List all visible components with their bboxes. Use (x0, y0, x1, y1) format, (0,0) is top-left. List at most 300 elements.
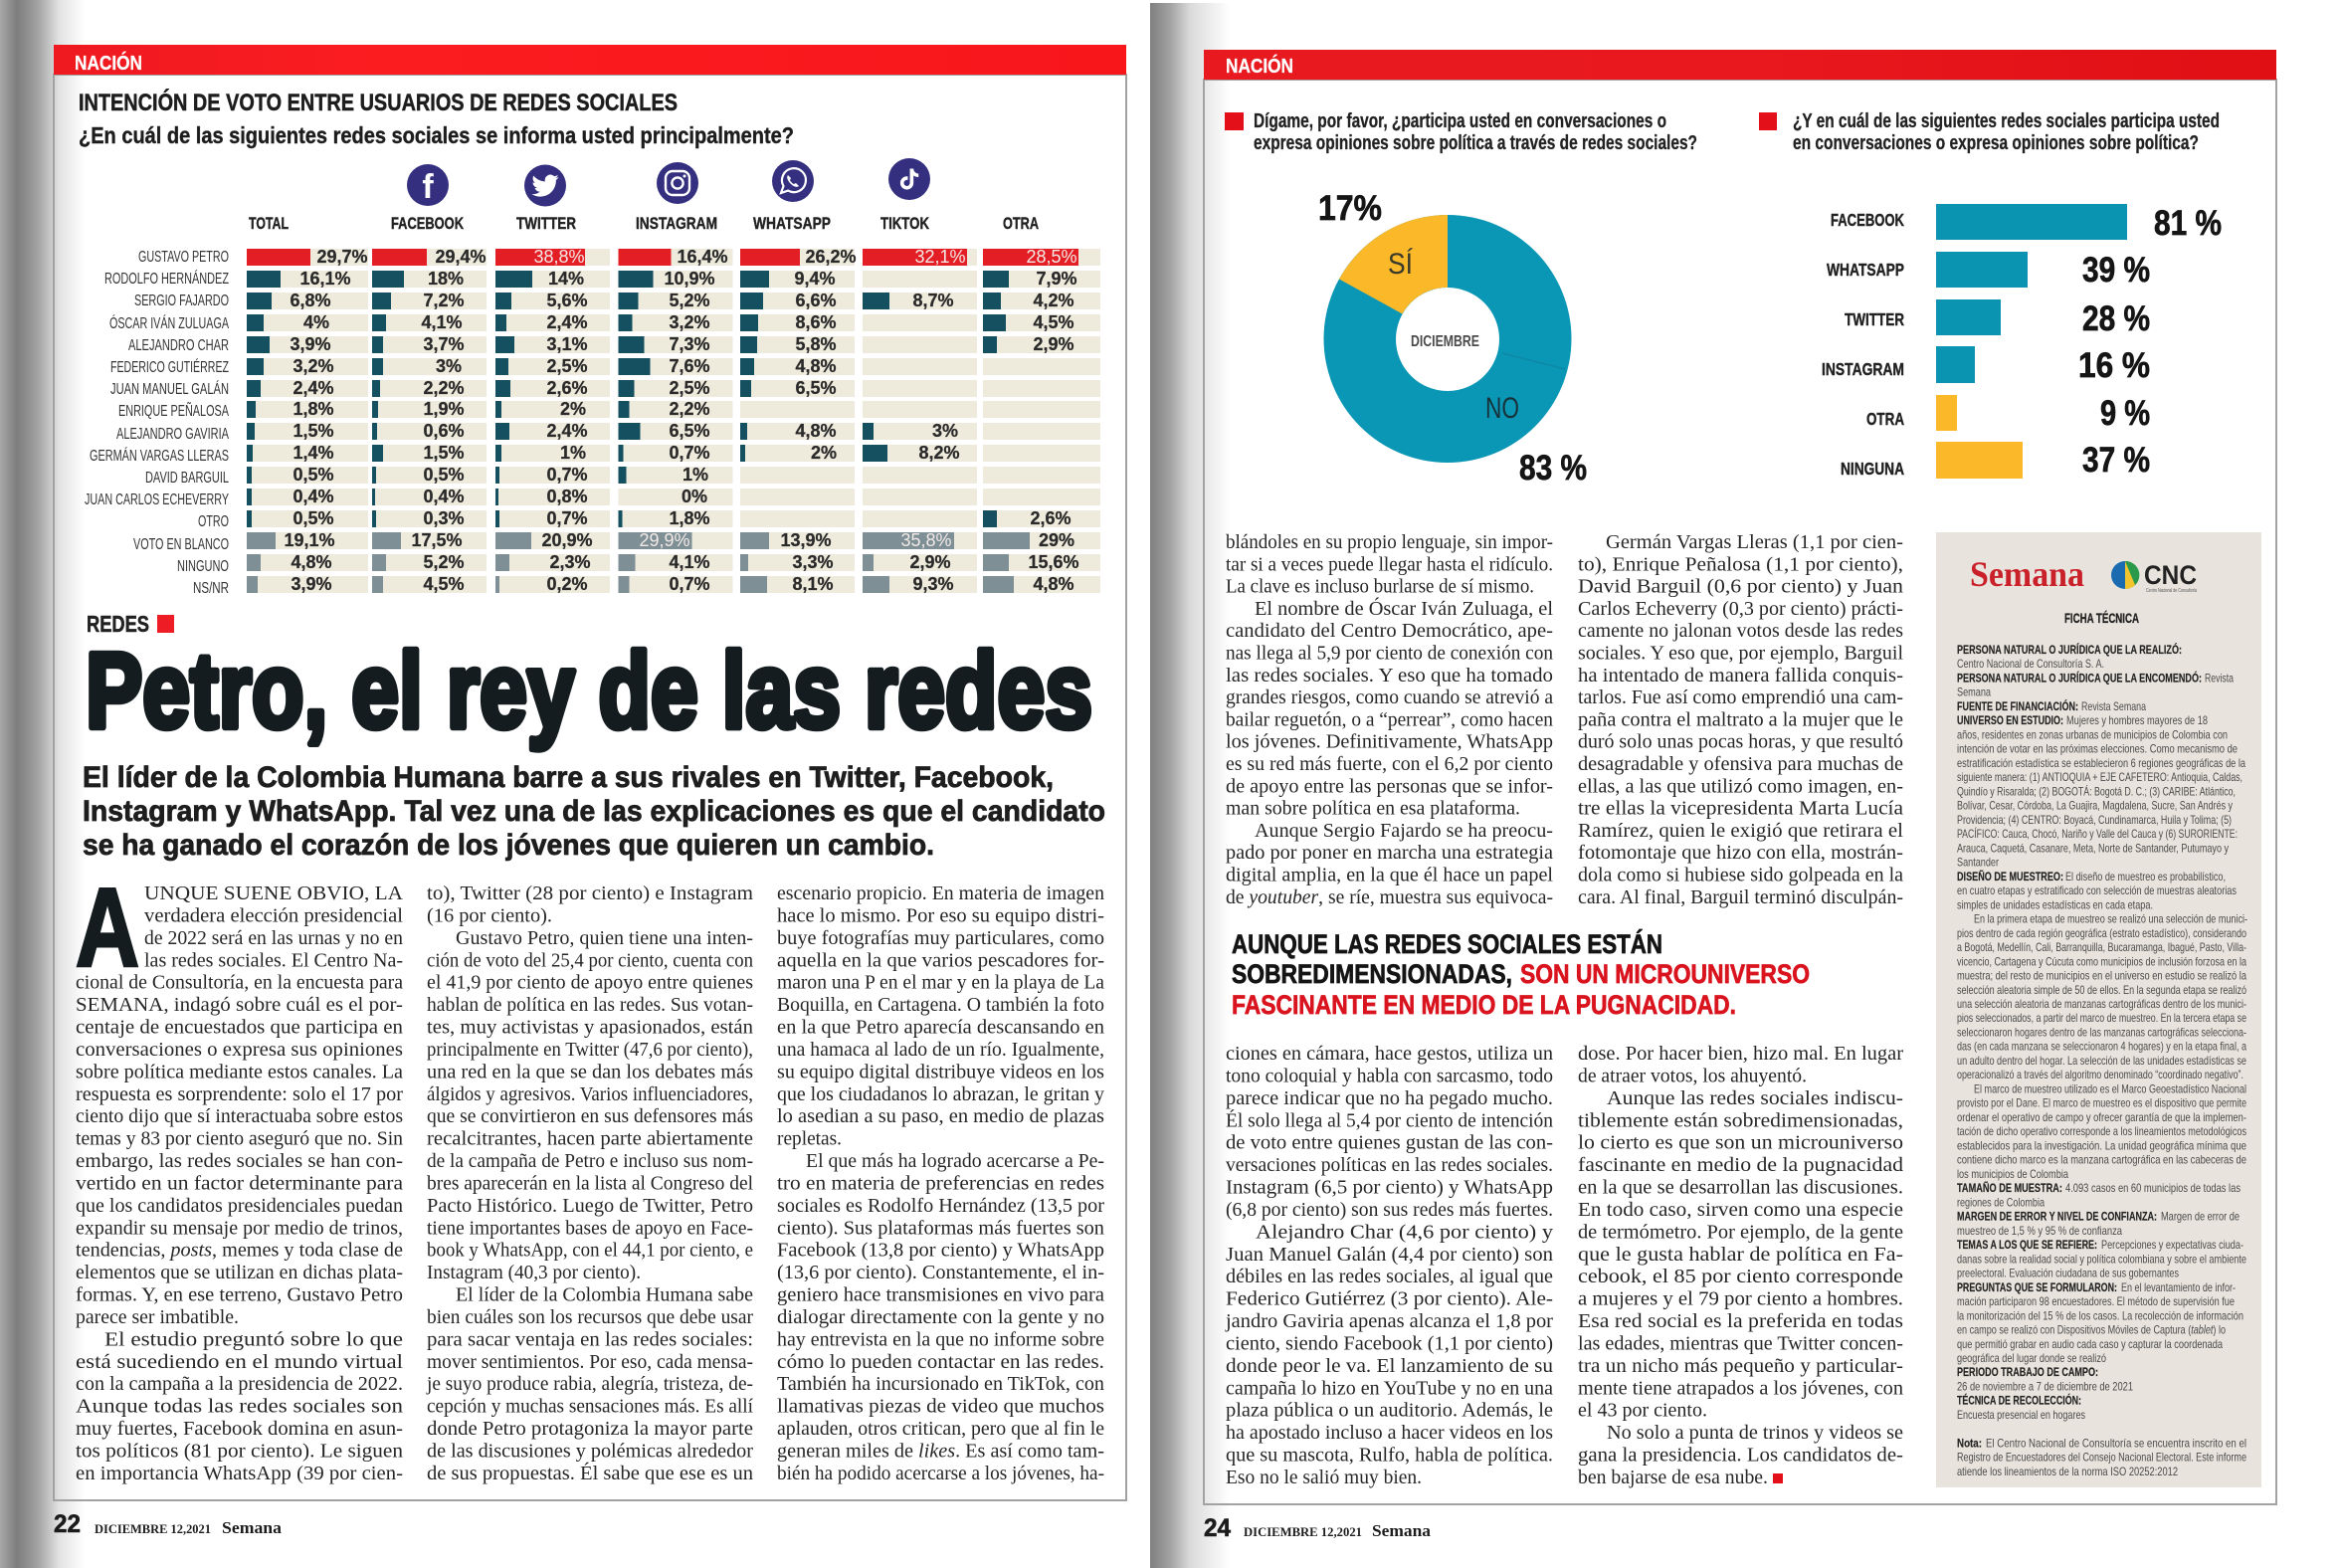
column: facebook: 4,5% (423, 574, 465, 594)
article lower column 1: jandro Gaviria apenas alcanza el 1,8 por (1225, 1310, 1553, 1332)
column: total: 3,9% (290, 334, 331, 354)
article lower column 2: de termómetro. Por ejemplo, de la gente (1578, 1221, 1903, 1243)
article column 1: SEMANA, indagó sobre cuál es el por- (76, 994, 403, 1016)
article column 2: álgidos y agresivos. Varios influenciadores, (427, 1083, 753, 1105)
article column 3: que los ciudadanos lo abrazan, le gritan y (777, 1083, 1104, 1105)
article column 2: book y WhatsApp, con el 44,1 por ciento, e (427, 1240, 753, 1262)
column: total: 0,5% (292, 508, 334, 528)
question 2 (1759, 110, 2220, 154)
column headers: FACEBOOK (391, 214, 465, 233)
article upper column 2: desagradable y ofensiva para muchas de (1578, 753, 1903, 775)
column: instagram: 5,2% (669, 291, 710, 310)
column: total: 19,1% (284, 530, 335, 550)
ficha text: Santander (1957, 856, 1999, 870)
article column 1: conversaciones o expresa sus opiniones (76, 1039, 403, 1061)
chart title: INTENCIÓN DE VOTO ENTRE USUARIOS DE REDES SOCIALES (79, 89, 678, 116)
column: whatsapp: 8,1% (792, 574, 834, 594)
question 1: Dígame, por favor, ¿participa usted en conversaciones o (1254, 110, 1666, 132)
article lower column 2: de atraer votos, los ahuyentó. (1578, 1065, 1807, 1086)
column headers (249, 214, 1039, 233)
ficha text: DISEÑO DE MUESTREO: (1957, 869, 2063, 883)
ficha heading: FICHA TÉCNICA (2064, 610, 2139, 626)
article upper column 1: los jóvenes. Definitivamente, WhatsApp (1226, 731, 1553, 753)
column: tiktok: 3% (932, 421, 958, 441)
ficha text: Revista (2205, 671, 2234, 685)
article upper column 2: tre ellas la vicepresidenta Marta Lucía (1578, 798, 1903, 820)
article column 3 (777, 882, 1104, 1484)
article column 2: hablan de política en las redes. Sus votan- (427, 994, 753, 1016)
article lower column 1: que su mascota, Rulfo, habla de política. (1226, 1445, 1553, 1467)
article column 1: verdadera elección presidencial (144, 904, 403, 926)
ficha text: siguiente manera: (1) ANTIOQUIA + EJE CAFETERO: Antioquia, Caldas, (1957, 770, 2242, 784)
row labels: candidates: GUSTAVO PETRO (138, 249, 229, 266)
section bar: Nación (1204, 50, 2276, 80)
article column 3: geniero hace transmisiones en vivo para (777, 1284, 1104, 1306)
article lower column 1: débiles en las redes sociales, al igual que (1226, 1266, 1553, 1287)
column: facebook: 1,5% (423, 443, 465, 463)
section bar: Nación (54, 45, 1126, 75)
column: twitter: 38,8% (533, 247, 585, 267)
article upper column 1 (1226, 531, 1553, 908)
article lower column 2: a mujeres y el 79 por ciento a hombres. (1578, 1288, 1903, 1310)
column: twitter: 0,7% (546, 465, 588, 485)
article column 1: embargo, las redes sociales se han con- (76, 1150, 403, 1172)
ficha text: atiende los lineamientos de la norma ISO 20252:2012 (1957, 1465, 2178, 1478)
donut chart (1318, 189, 1587, 488)
column headers: TWITTER (516, 214, 576, 233)
article lower column 2: tiblemente están sobredimensionadas, (1578, 1109, 1903, 1131)
question 1: expresa opiniones sobre política a través de redes sociales? (1254, 132, 1697, 154)
column: tiktok: 2,9% (909, 552, 951, 572)
article column 2: principalmente en Twitter (47,6 por ciento), (427, 1039, 753, 1061)
ficha text: TAMAÑO DE MUESTRA: (1957, 1180, 2062, 1195)
article column 2: to), Twitter (28 por ciento) e Instagram (427, 882, 753, 904)
column: twitter: 0,7% (546, 508, 588, 528)
row labels: candidates: ENRIQUE PEÑALOSA (118, 403, 229, 420)
ficha text: la monitorización del 15 % de los casos. La recolección de información (1957, 1308, 2243, 1322)
column: twitter: 2,5% (546, 356, 588, 376)
donut chart: SÍ (1388, 248, 1414, 281)
column: facebook: 2,2% (423, 378, 465, 398)
ficha text: vicencio, Cartagena y Cúcuta como municipios de inclusión forzosa en la (1957, 954, 2246, 968)
article column 3: aplauden, otros critican, pero que al fin le (777, 1418, 1104, 1440)
ficha text: estratificación estadística se establecieron 6 regiones geográficas de la (1957, 756, 2245, 770)
column: whatsapp: 2% (811, 443, 837, 463)
article column 1: expandir su mensaje por medio de trinos, (76, 1217, 403, 1239)
article column 2: cepción y muchas sensaciones más. Es allí (427, 1396, 753, 1418)
ficha text: simples de unidades estadísticas en cada etapa. (1957, 897, 2153, 911)
column headers: WHATSAPP (753, 214, 831, 233)
article column 1: vertido en un factor determinante para (76, 1172, 403, 1194)
article column 2: para sacar ventaja en las redes sociales: (427, 1328, 753, 1350)
ficha text: Bolívar, Cesar, Córdoba, La Guajira, Magdalena, Sucre, San Andrés y (1957, 799, 2233, 813)
ficha text: El marco de muestreo utilizado es el Marco Geoestadístico Nacional (1974, 1081, 2246, 1095)
article column 2: de sus propuestas. Él sabe que ese es un (427, 1462, 753, 1484)
bar chart: participation by network: 39 % (2082, 251, 2150, 290)
column: total: 4,8% (291, 552, 332, 572)
ficha text: danas sobre la realidad social y política colombiana y sobre el ambiente (1957, 1252, 2246, 1266)
article column 3: lo asedian a su paso, en medio de plazas (777, 1105, 1104, 1127)
article upper column 1: blándoles en su propio lenguaje, sin impor- (1226, 531, 1553, 553)
column: tiktok: 8,2% (918, 443, 960, 463)
pull quote (1232, 928, 1810, 1020)
column: instagram: 6,5% (669, 421, 710, 441)
column: twitter: 2,3% (549, 552, 591, 572)
article column 2: bres aparecerán en la lista al Congreso del (427, 1172, 753, 1194)
article upper column 2: Ramírez, quien le exigió que retirara el (1578, 820, 1903, 842)
column: instagram: 16,4% (677, 247, 728, 267)
column: twitter (495, 247, 610, 594)
row labels: candidates: JUAN CARLOS ECHEVERRY (85, 491, 229, 508)
panel: right page (1204, 50, 2276, 1542)
column: facebook: 5,2% (423, 552, 465, 572)
row labels: candidates: NINGUNO (177, 558, 229, 575)
ficha text: pios dentro de cada región geográfica (estrato estadístico), considerando (1957, 926, 2246, 940)
ficha text: los municipios de Colombia (1957, 1167, 2068, 1181)
bar chart: participation by network: 9 % (2100, 394, 2150, 433)
article lower column 1: Instagram (6,5 por ciento) y WhatsApp (1226, 1176, 1553, 1198)
article column 1: que los candidatos presidenciales puedan (76, 1195, 403, 1217)
ficha text: PERSONA NATURAL O JURÍDICA QUE LA ENCOMENDÓ: (1957, 671, 2202, 685)
page footer: 24: 24 (1204, 1514, 1231, 1542)
pull quote: SON UN MICROUNIVERSO (1520, 959, 1810, 989)
ficha text: 4.093 casos en 60 municipios de todas las (2065, 1181, 2241, 1195)
page footer: 22 (54, 1510, 283, 1538)
donut chart: 17% (1318, 189, 1382, 228)
article column 2: mover sentimientos. Por eso, cada mensa- (427, 1351, 753, 1373)
question 2: ¿Y en cuál de las siguientes redes sociales participa usted (1793, 110, 2220, 132)
column: total: 29,7% (316, 247, 368, 267)
bar chart: participation by network: INSTAGRAM (1822, 359, 1904, 379)
article column 2: je suyo produce rabia, alegría, tristeza, de- (426, 1373, 753, 1395)
column: otra: 4,5% (1033, 312, 1074, 332)
article upper column 1: bailar reguetón, o a “perrear”, como hacen (1226, 708, 1553, 730)
column: facebook: 3% (436, 356, 462, 376)
article upper column 1: man sobre política en esa plataforma. (1226, 798, 1520, 820)
article column 3: hace lo mismo. Por eso su equipo distri- (777, 904, 1104, 926)
column: otra: 2,9% (1033, 334, 1074, 354)
article lower column 2 (1578, 1043, 1903, 1488)
ficha text: PERIODO TRABAJO DE CAMPO: (1957, 1365, 2098, 1379)
row labels: candidates: GERMÁN VARGAS LLERAS (90, 448, 229, 465)
article lower column 1: campaña lo hizo en YouTube y no en una (1226, 1377, 1553, 1399)
column headers: OTRA (1003, 214, 1039, 233)
article lower column 2: cebook, el 85 por ciento corresponde (1578, 1266, 1903, 1287)
ficha text: Providencia; (4) CENTRO: Boyacá, Cundinamarca, Huila y Tolima; (5) (1957, 813, 2232, 827)
article column 2: de las discusiones y polémicas alrededor (427, 1441, 753, 1463)
article upper column 2: Carlos Echeverry (0,3 por ciento) prácti- (1578, 598, 1903, 620)
ficha text: PACÍFICO: Cauca, Chocó, Nariño y Valle del Cauca y (6) SURORIENTE: (1957, 826, 2238, 841)
article column 2: una red en la que se dan los debates más (427, 1061, 753, 1082)
article column 2: tes, muy activistas y apasionados, están (427, 1017, 753, 1039)
ficha text: Nota: (1957, 1436, 1982, 1450)
article lower column 1: ciones en cámara, hace gestos, utiliza un (1226, 1043, 1553, 1065)
row labels: candidates: RODOLFO HERNÁNDEZ (104, 271, 229, 288)
column: otra: 4,2% (1033, 291, 1074, 310)
column: twitter: 5,6% (546, 291, 588, 310)
article lower column 2: No solo a punta de trinos y videos se (1607, 1422, 1903, 1444)
article lower column 1: ha apostado incluso a hacer videos en los (1226, 1422, 1553, 1444)
column: twitter: 2,4% (546, 421, 588, 441)
article upper column 1: La clave es incluso burlarse de sí mismo. (1226, 576, 1534, 598)
column: whatsapp: 9,4% (794, 269, 836, 289)
article upper column 1: las redes sociales. Y eso que ha tomado (1226, 665, 1553, 686)
article column 2: bien cuáles son los recursos que debe usar (427, 1306, 753, 1328)
column: instagram: 0% (682, 487, 707, 506)
article column 1: temas y 83 por ciento aseguró que no. Sin (76, 1128, 403, 1150)
article upper column 1: candidato del Centro Democrático, ape- (1226, 620, 1553, 642)
article column 3: sociales es Rodolfo Hernández (13,5 por (777, 1195, 1104, 1217)
column: total: 1,5% (292, 421, 334, 441)
bar chart: participation by network: FACEBOOK (1831, 210, 1904, 230)
column: twitter: 2,4% (546, 312, 588, 332)
article column 2: Instagram (40,3 por ciento). (427, 1262, 641, 1283)
column: total (247, 247, 368, 594)
column: total: 3,9% (291, 574, 332, 594)
donut chart: DICIEMBRE (1411, 333, 1479, 350)
row labels: candidates: VOTO EN BLANCO (133, 536, 229, 553)
article column 1 (76, 882, 404, 1484)
ficha text: geográfica del lugar donde se realizó (1957, 1351, 2106, 1365)
article column 1: elementos que se utilizan en dichas plata- (76, 1262, 403, 1283)
article column 2: recalcitrantes, hacen parte abiertamente (427, 1128, 753, 1150)
article lower column 2: en la que se desarrollan las discusiones. (1578, 1176, 1903, 1198)
article upper column 2: tarlos. Fue así como emprendió una cam- (1578, 686, 1903, 708)
subheadline: Instagram y WhatsApp. Tal vez una de las explicaciones es que el candidato (83, 795, 1105, 828)
column: whatsapp: 4,8% (795, 421, 837, 441)
column: facebook: 4,1% (421, 312, 463, 332)
column: instagram: 29,9% (639, 530, 690, 550)
ficha text: TEMAS A LOS QUE SE REFIERE: (1957, 1238, 2097, 1252)
ficha text: operacionalizó a través del algoritmo denominado “coordinado negativo”. (1957, 1068, 2243, 1081)
article upper column 2: duró solo unas pocas horas, y que resultó (1578, 731, 1903, 753)
column: total: 1,4% (292, 443, 334, 463)
ficha text: provisto por el Dane. El marco de muestreo es el dispositivo que permite (1957, 1096, 2246, 1110)
row labels: candidates: ALEJANDRO GAVIRIA (116, 426, 229, 443)
article upper column 1: digital amplia, en la que él hace un papel (1226, 864, 1553, 885)
article column 3: su equipo digital distribuye videos en los (777, 1061, 1104, 1082)
column: twitter: 2,6% (546, 378, 588, 398)
page footer: 22: DICIEMBRE 12,2021 (95, 1521, 211, 1536)
ficha text: en campo se realizó con Dispositivos Móviles de Captura (tablet) lo (1957, 1323, 2226, 1337)
column: facebook: 17,5% (411, 530, 463, 550)
chart subtitle: ¿En cuál de las siguientes redes sociales se informa usted principalmente? (79, 122, 794, 148)
column: tiktok: 35,8% (900, 530, 952, 550)
drop cap: A (76, 866, 139, 990)
article column 2: (16 por ciento). (427, 904, 552, 926)
article lower column 1 (1225, 1043, 1553, 1488)
article column 1: formas. Y, en ese terreno, Gustavo Petro (76, 1284, 403, 1306)
icon: tiktok (888, 158, 930, 200)
article column 3: buye fotografías muy particulares, como (777, 927, 1104, 949)
article column 3: Facebook (13,8 por ciento) y WhatsApp (777, 1240, 1104, 1262)
article lower column 1: versaciones políticas en las redes sociales. (1226, 1154, 1553, 1176)
ficha text: ordenar el operativo de campo y ofrecer garantía de que la implemen- (1957, 1110, 2246, 1124)
column: tiktok (863, 247, 977, 594)
ficha text: TÉCNICA DE RECOLECCIÓN: (1957, 1393, 2081, 1408)
article column 3: El que más ha logrado acercarse a Pe- (806, 1150, 1104, 1172)
ficha text: tación de dicho operativo corresponde a los lineamientos metodológicos (1957, 1124, 2246, 1138)
article column 3: cómo lo pueden contactar en las redes. (777, 1351, 1104, 1373)
article column 1: está sucediendo en el mundo virtual (76, 1351, 404, 1373)
column: whatsapp: 5,8% (795, 334, 837, 354)
column: total: 2,4% (292, 378, 334, 398)
article column 1: tos políticos (81 por ciento). Le siguen (76, 1441, 403, 1463)
ficha text: Margen de error de (2161, 1210, 2240, 1224)
column: facebook (372, 247, 487, 594)
article upper column 1: grandes riesgos, como cuando se atrevió a (1226, 686, 1553, 708)
article column 1: sobre política mediante estos canales. La (76, 1061, 403, 1082)
article column 3: dialogar directamente con la gente y no (777, 1306, 1104, 1328)
ficha text: Quindío y Risaralda; (2) BOGOTÁ: Bogotá D. C.; (3) CARIBE: Atlántico, (1957, 783, 2236, 798)
column: facebook: 7,2% (423, 291, 465, 310)
article lower column 1: Alejandro Char (4,6 por ciento) y (1256, 1221, 1553, 1243)
page footer: 22: Semana (222, 1518, 283, 1537)
question 1 (1225, 110, 1697, 154)
article column 3: llamativas piezas de video que muchos (777, 1396, 1104, 1418)
article column 1: con la campaña a la presidencia de 2022. (76, 1373, 403, 1395)
ficha text: seleccionaron hogares dentro de las manzanas cartográficas selecciona- (1957, 1025, 2246, 1039)
subheadline: se ha ganado el corazón de los jóvenes que quieren un cambio. (83, 829, 934, 862)
bar chart: participation by network (1822, 204, 2222, 480)
icon: twitter (524, 165, 566, 207)
column: whatsapp: 4,8% (795, 356, 837, 376)
column: whatsapp: 26,2% (805, 247, 857, 267)
article column 1: ciento dijo que sí interactuaba sobre estos (76, 1105, 403, 1127)
page footer: 24: DICIEMBRE 12,2021 (1244, 1524, 1362, 1539)
article lower column 1: plaza pública o un auditorio. Además, le (1226, 1400, 1553, 1422)
ficha text: PERSONA NATURAL O JURÍDICA QUE LA REALIZÓ: (1957, 642, 2182, 657)
column: otra: 29% (1039, 530, 1074, 550)
article upper column 1: Aunque Sergio Fajardo se ha preocu- (1255, 820, 1553, 842)
row labels: candidates: SERGIO FAJARDO (134, 293, 229, 309)
article upper column 1: tar si a veces puede llegar hasta el ridículo. (1226, 553, 1553, 575)
article column 1: tendencias, posts, memes y toda clase de (76, 1240, 403, 1262)
ficha text: Encuesta presencial en hogares (1957, 1408, 2085, 1422)
article column 2: que se convirtieron en sus defensores más (427, 1105, 753, 1127)
article upper column 2: to), Enrique Peñalosa (1,1 por ciento), (1578, 553, 1903, 575)
ficha text: Centro Nacional de Consultoría S. A. (1957, 657, 2104, 671)
article column 3: una hamaca al lado de un río. Igualmente, (777, 1039, 1104, 1061)
article column 3: hay entrevista en la que no informe sobre (777, 1328, 1104, 1350)
article column 3: aquella en la que varios pescadores for- (777, 949, 1104, 971)
column: twitter: 3,1% (546, 334, 588, 354)
column: instagram: 1,8% (669, 508, 710, 528)
row labels: candidates: NS/NR (193, 580, 229, 597)
article column 3: ciento). Sus plataformas más fuertes son (777, 1217, 1104, 1239)
icon: instagram (657, 162, 698, 204)
bar chart: participation by network: WHATSAPP (1827, 260, 1904, 280)
article upper column 2: sociales. Y eso que, por ejemplo, Barguil (1578, 643, 1903, 665)
column: whatsapp: 6,5% (795, 378, 837, 398)
ficha text: muestreo de 1,5 % y 95 % de confianza (1957, 1224, 2122, 1238)
ficha text: 26 de noviembre a 7 de diciembre de 2021 (1957, 1379, 2133, 1393)
article lower column 1: Él solo llega al 5,4 por ciento de intención (1226, 1108, 1553, 1131)
column: total: 1,8% (292, 399, 334, 419)
article column 2: Gustavo Petro, quien tiene una inten- (456, 927, 753, 949)
ficha text: PREGUNTAS QUE SE FORMULARON: (1957, 1280, 2117, 1294)
article lower column 2: tra un nicho más pequeño y particular- (1578, 1355, 1903, 1377)
ficha text: MARGEN DE ERROR Y NIVEL DE CONFIANZA: (1957, 1210, 2157, 1224)
ficha text: das (en cada manzana se seleccionaron 4 hogares) y en la etapa final, a (1957, 1040, 2246, 1054)
subheadline: El líder de la Colombia Humana barre a sus rivales en Twitter, Facebook, (83, 761, 1054, 794)
ficha text: pios seleccionados, a partir del marco de muestreo. En la tercera etapa se (1957, 1011, 2246, 1025)
column: total: 3,2% (292, 356, 334, 376)
ficha text: Registro de Encuestadores del Consejo Nacional Electoral. Este informe (1957, 1451, 2246, 1465)
column: instagram: 4,1% (669, 552, 710, 572)
row labels: candidates: ÓSCAR IVÁN ZULUAGA (109, 315, 229, 332)
page footer: 24: Semana (1372, 1521, 1432, 1540)
article lower column 1: (6,8 por ciento) son sus redes más fuertes. (1226, 1199, 1553, 1221)
article column 3: escenario propicio. En materia de imagen (777, 882, 1104, 904)
article upper column 2: fotomontaje que hizo con ella, mostrán- (1578, 842, 1903, 864)
column: twitter: 1% (560, 443, 586, 463)
article column 2: de la campaña de Petro e incluso sus nom- (427, 1150, 753, 1172)
article lower column 1: Eso no le salió muy bien. (1226, 1467, 1422, 1488)
column: instagram: 7,3% (669, 334, 710, 354)
column: whatsapp: 8,6% (795, 312, 837, 332)
article upper column 1: de youtuber, se ríe, muestra sus equivoca- (1226, 886, 1553, 908)
article column 1: El estudio preguntó sobre lo que (104, 1328, 403, 1350)
article column 1: de 2022 será en las urnas y no en (144, 927, 403, 949)
bar chart: participation by network: TWITTER (1845, 309, 1904, 329)
column: total: 0,4% (292, 487, 334, 506)
row labels: candidates: JUAN MANUEL GALÁN (110, 381, 229, 398)
article upper column 2 (1578, 531, 1903, 908)
column: twitter: 14% (548, 269, 584, 289)
panel: left page (54, 45, 1126, 1538)
ficha text: que permitió grabar en audio cada caso y capturar la coordenada (1957, 1337, 2223, 1351)
ficha text: Revista Semana (2081, 699, 2146, 713)
column: total: 4% (303, 312, 329, 332)
article column 2: donde Petro protagoniza la mayor parte (427, 1418, 753, 1440)
article lower column 2: las edades, mientras que Twitter concen- (1578, 1333, 1903, 1355)
ficha text: años, residentes en zonas urbanas de municipios de Colombia con (1957, 727, 2228, 741)
column: otra: 7,9% (1036, 269, 1077, 289)
article column 3: (13,6 por ciento). Constantemente, el in- (777, 1262, 1104, 1283)
icon: facebook (407, 164, 449, 206)
column: otra: 4,8% (1033, 574, 1074, 594)
column: total: 0,5% (292, 465, 334, 485)
ficha text: a Bogotá, Medellín, Cali, Barranquilla, Bucaramanga, Ibagué, Pasto, Villa- (1957, 940, 2246, 954)
article column 1: UNQUE SUENE OBVIO, LA (144, 882, 404, 904)
article lower column 2: dose. Por hacer bien, hizo mal. En lugar (1578, 1043, 1903, 1065)
article column 3: bién ha podido acercarse a los jóvenes, ha- (777, 1463, 1104, 1484)
section bar: Nación: NACIÓN (1226, 54, 1293, 78)
page footer: 22: 22 (54, 1510, 81, 1538)
article column 3: También ha incursionado en TikTok, con (777, 1373, 1104, 1395)
ficha text: FUENTE DE FINANCIACIÓN: (1957, 698, 2078, 713)
page footer: 24 (1204, 1514, 1432, 1542)
article column 3: tro en materia de preferencias en redes (777, 1172, 1104, 1194)
article upper column 2: ellas, a las que utilizó como imagen, en- (1578, 775, 1903, 797)
ficha text: Percepciones y expectativas ciuda- (2101, 1238, 2243, 1252)
article upper column 1: pado por poner en marcha una estrategia (1226, 842, 1553, 864)
column: twitter: 0,8% (546, 487, 588, 506)
column: instagram: 1% (682, 465, 708, 485)
ficha text: Mujeres y hombres mayores de 18 (2066, 713, 2208, 727)
headline: Petro, el rey de las redes (86, 630, 1092, 750)
article column 2: ción de voto del 25,4 por ciento, cuenta con (427, 949, 753, 971)
article lower column 2: Esa red social es la preferida en todas (1578, 1310, 1903, 1332)
article lower column 2: gana la presidencia. Los candidatos de- (1578, 1445, 1903, 1467)
column: tiktok: 8,7% (912, 291, 954, 310)
article lower column 2: ben bajarse de esa nube. (1578, 1467, 1768, 1488)
column: instagram: 10,9% (664, 269, 715, 289)
ficha text: establecidos para la investigación. La unidad geográfica mínima que (1957, 1138, 2246, 1152)
icon: facebook: f (422, 168, 434, 206)
ficha text: muestra; del resto de municipios en el universo en estudio se realizó la (1957, 969, 2246, 983)
